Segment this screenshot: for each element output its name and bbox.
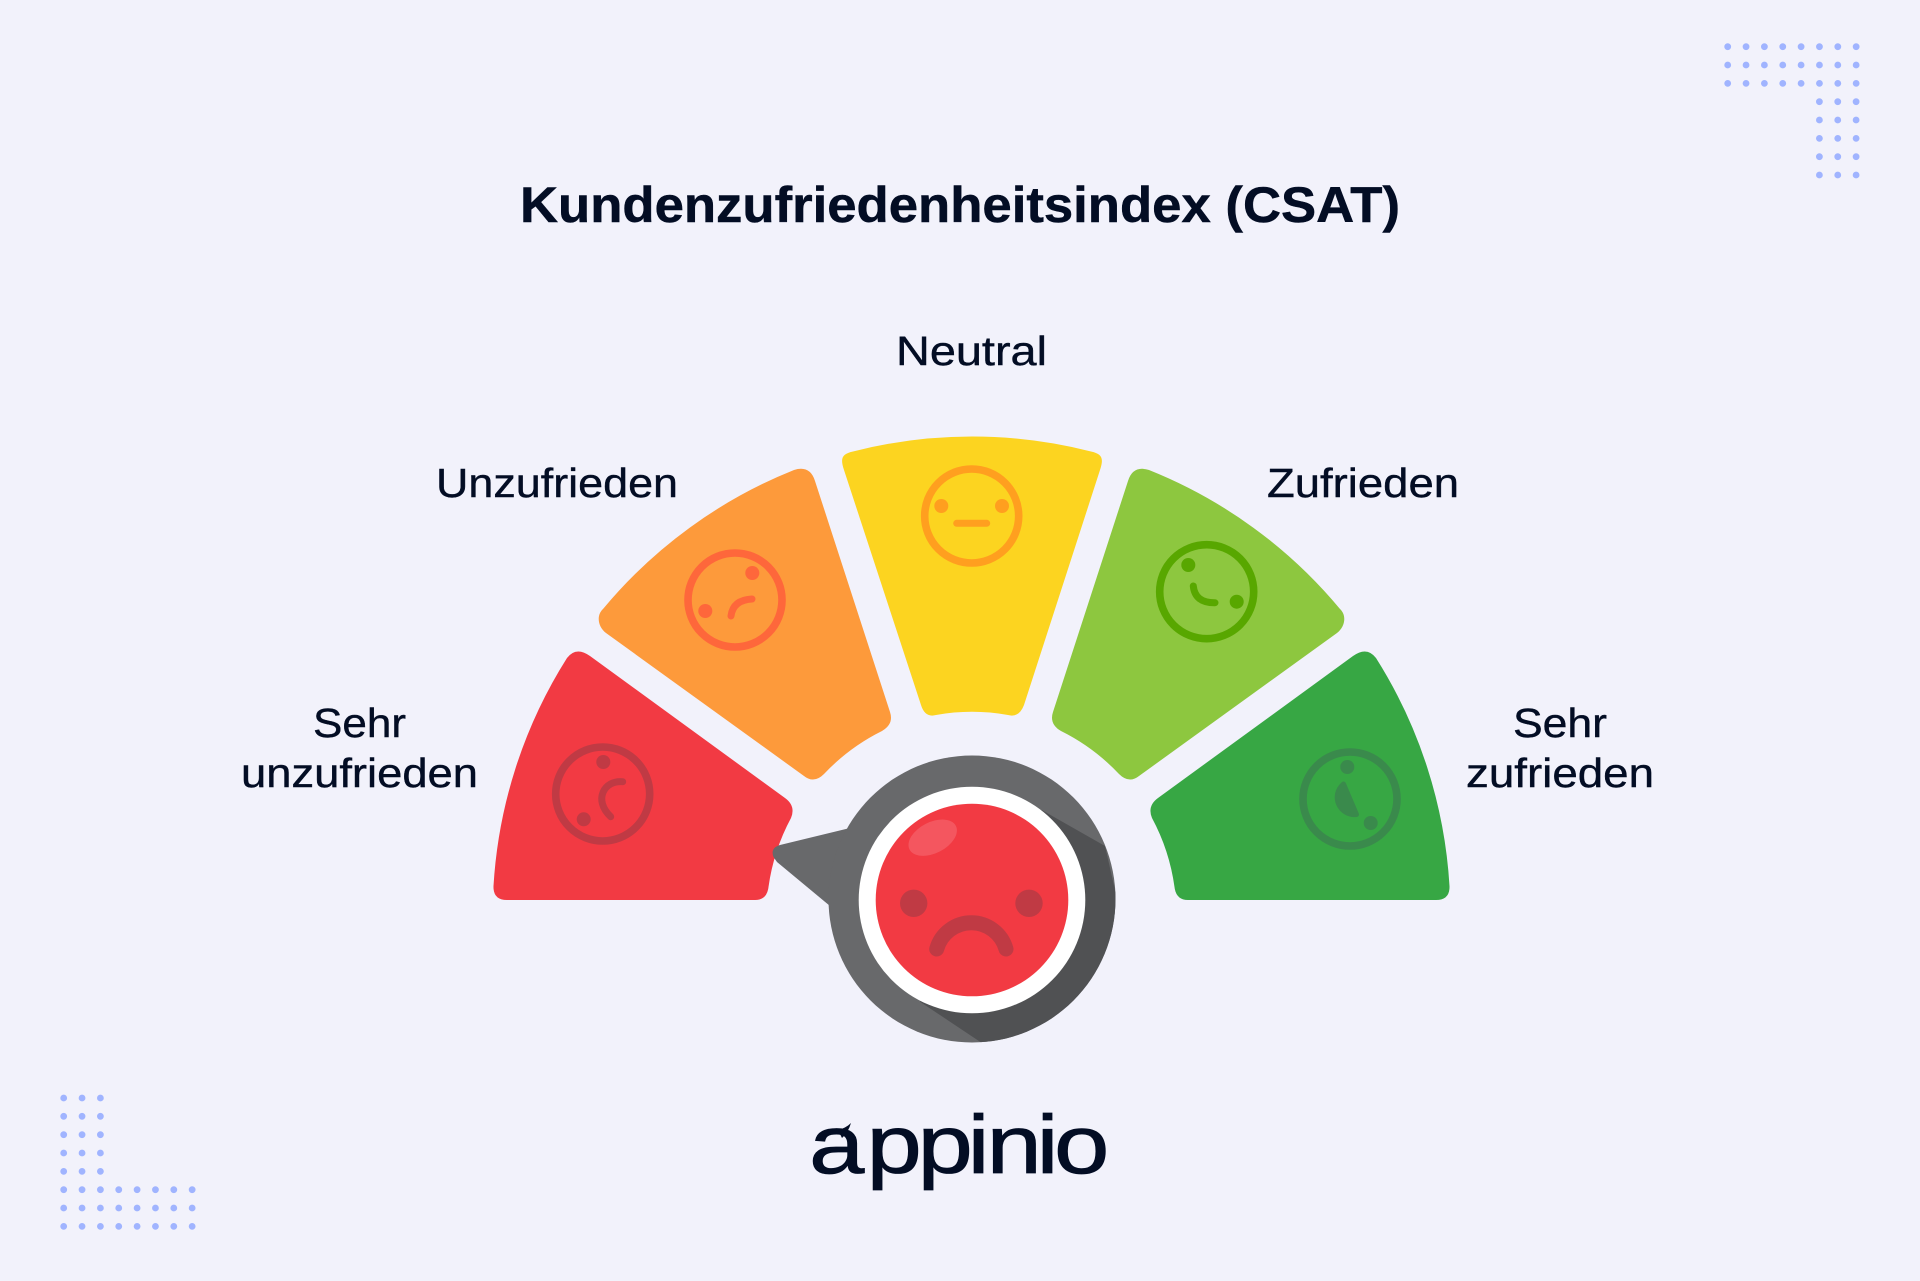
segment: satisfied — [1052, 469, 1344, 780]
big sad face — [876, 804, 1068, 996]
label: Sehr unzufrieden: unzufrieden — [241, 750, 478, 796]
dot pattern: top right — [1728, 47, 1856, 175]
label: Sehr zufrieden: Sehr — [1513, 700, 1607, 746]
segment: very unsatisfied — [493, 651, 793, 900]
icon: satisfied face — [1160, 545, 1254, 639]
gauge dial with pointer — [772, 756, 1116, 1042]
icon: very unsatisfied face — [556, 747, 650, 841]
logo: appinio: appinio — [809, 1099, 1109, 1191]
title: Kundenzufriedenheitsindex (CSAT) — [520, 177, 1400, 233]
label: Sehr unzufrieden — [241, 700, 478, 796]
icon: very satisfied face — [1303, 752, 1397, 846]
icon: unsatisfied face — [688, 553, 782, 647]
label: Sehr zufrieden — [1466, 700, 1654, 796]
label: Sehr unzufrieden: Sehr — [313, 700, 406, 746]
label: Unzufrieden: Unzufrieden — [436, 460, 678, 506]
segment: very satisfied — [1150, 651, 1450, 900]
segment: unsatisfied — [599, 469, 891, 780]
pointer — [773, 828, 850, 906]
label: Sehr zufrieden: zufrieden — [1466, 750, 1654, 796]
segment: neutral — [842, 437, 1102, 716]
label: Zufrieden: Zufrieden — [1267, 460, 1459, 506]
label: Neutral: Neutral — [896, 328, 1047, 374]
icon: neutral face — [925, 469, 1019, 563]
dot pattern: bottom left — [64, 1098, 192, 1226]
